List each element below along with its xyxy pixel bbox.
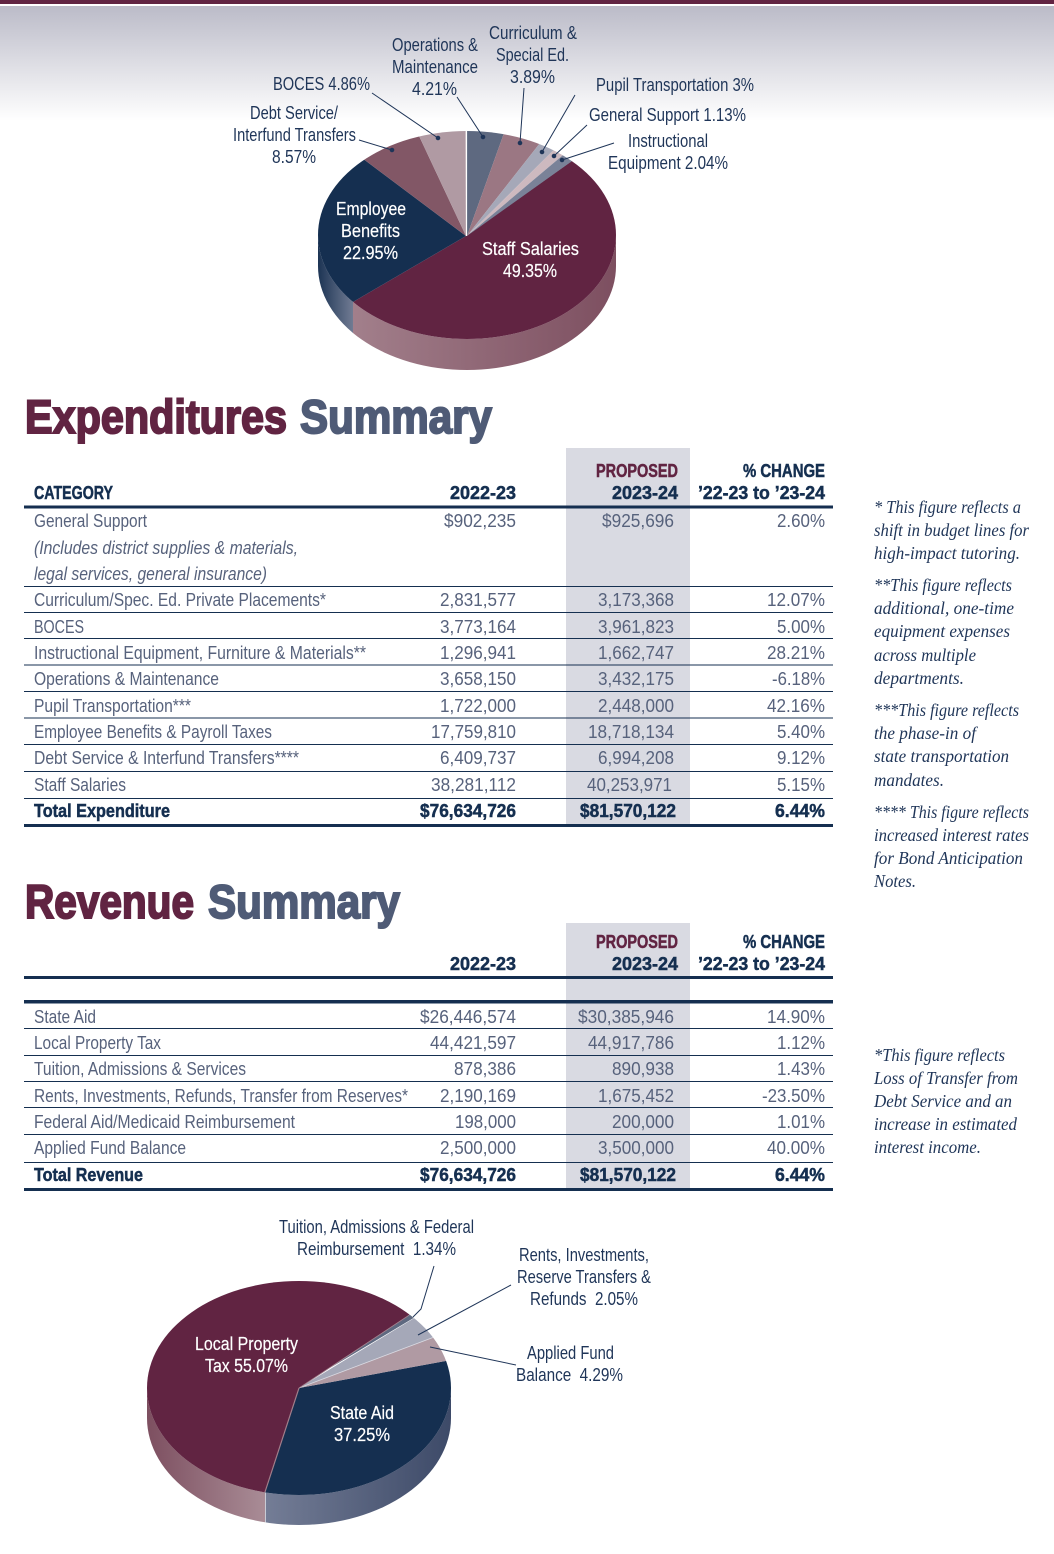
total row <box>34 1164 825 1185</box>
footnotes: expenditures: ***This figure reflects <box>874 700 1019 720</box>
table rows: 18,718,134 <box>588 721 674 742</box>
heading: revenue summary: Revenue <box>25 875 194 928</box>
table rows: (Includes district supplies & materials, <box>34 537 298 558</box>
total row: 6.44% <box>775 1164 825 1185</box>
table rows: 6,409,737 <box>440 747 516 768</box>
total row: 6.44% <box>775 800 825 821</box>
table rows: 40.00% <box>767 1137 825 1158</box>
table rows: 5.00% <box>777 616 825 637</box>
table rows: 3,658,150 <box>440 668 516 689</box>
pie labels: expenditures: 22.95% <box>343 242 398 263</box>
footnotes: expenditures: mandates. <box>874 770 944 790</box>
table header: 2022-23 <box>450 953 516 974</box>
table rows <box>34 510 825 795</box>
footnotes: expenditures <box>873 497 1029 891</box>
table header: ’22-23 to ’23-24 <box>698 953 826 974</box>
table header: CATEGORY <box>34 482 114 503</box>
table header: % CHANGE <box>743 931 825 952</box>
table rows: Local Property Tax <box>34 1032 162 1053</box>
leader lines: expenditures pie <box>359 88 614 162</box>
footnotes: expenditures: the phase-in of <box>874 723 978 743</box>
table rows: Pupil Transportation*** <box>34 695 191 716</box>
footnotes: expenditures: for Bond Anticipation <box>874 848 1023 868</box>
heading: revenue summary: Summary <box>208 875 400 928</box>
footnote: revenue: interest income. <box>874 1137 981 1157</box>
footnotes: expenditures: **This figure reflects <box>874 575 1012 595</box>
table rows: 2,500,000 <box>440 1137 516 1158</box>
pie labels: expenditures: Maintenance <box>392 56 478 77</box>
top banner <box>0 0 1054 131</box>
table rows: $26,446,574 <box>420 1006 516 1027</box>
table rows: 200,000 <box>612 1111 674 1132</box>
table header: 2023-24 <box>612 482 679 503</box>
table rows: 42.16% <box>767 695 825 716</box>
pie labels: expenditures: Operations & <box>392 34 479 55</box>
pie labels: revenue: 37.25% <box>334 1424 390 1445</box>
table rows: -6.18% <box>772 668 825 689</box>
pie labels: expenditures: General Support 1.13% <box>589 104 746 125</box>
footnotes: expenditures: equipment expenses <box>874 621 1010 641</box>
footnote: revenue: Debt Service and an <box>873 1091 1012 1111</box>
table rows: Curriculum/Spec. Ed. Private Placements* <box>34 589 326 610</box>
pie labels: expenditures: Curriculum & <box>489 22 578 43</box>
pie labels: revenue: Tax 55.07% <box>205 1355 288 1376</box>
footnotes: expenditures: state transportation <box>874 746 1009 766</box>
total row: $76,634,726 <box>420 1164 516 1185</box>
table rows: 28.21% <box>767 642 825 663</box>
pie labels: revenue: Applied Fund <box>527 1342 614 1363</box>
table rows: 3,173,368 <box>598 589 674 610</box>
pie labels: expenditures: Special Ed. <box>496 44 569 65</box>
table rows: $902,235 <box>444 510 516 531</box>
table rows: Applied Fund Balance <box>34 1137 186 1158</box>
table rows: $925,696 <box>602 510 674 531</box>
table rows: 9.12% <box>777 747 825 768</box>
pie labels: expenditures: 49.35% <box>503 260 557 281</box>
pie labels: expenditures: 3.89% <box>510 66 555 87</box>
pie labels: expenditures: Equipment 2.04% <box>608 152 728 173</box>
expenditures pie chart <box>318 131 616 370</box>
footnotes: expenditures: Notes. <box>873 871 916 891</box>
table rows: $30,385,946 <box>578 1006 674 1027</box>
table rows: 890,938 <box>612 1058 674 1079</box>
table rows: Rents, Investments, Refunds, Transfer from Reserves* <box>34 1085 408 1106</box>
table rows <box>34 1006 825 1158</box>
pie labels: revenue: Tuition, Admissions & Federal <box>279 1216 474 1237</box>
pie labels: revenue: Reserve Transfers & <box>517 1266 652 1287</box>
table rows: 878,386 <box>454 1058 516 1079</box>
table rows: 3,432,175 <box>598 668 674 689</box>
table rows: -23.50% <box>762 1085 825 1106</box>
table rows: 1,662,747 <box>598 642 674 663</box>
table header: 2023-24 <box>612 953 679 974</box>
footnotes: expenditures: increased interest rates <box>874 825 1029 845</box>
table header: ’22-23 to ’23-24 <box>698 482 826 503</box>
total row: $76,634,726 <box>420 800 516 821</box>
revenue pie chart <box>147 1281 451 1525</box>
table rows: 44,421,597 <box>430 1032 516 1053</box>
table: expenditures <box>24 448 833 827</box>
total row <box>34 800 825 821</box>
table rows: Operations & Maintenance <box>34 668 219 689</box>
pie labels: expenditures: Benefits <box>341 220 400 241</box>
heading: expenditures summary: Summary <box>300 390 492 443</box>
table rows: 2,831,577 <box>440 589 516 610</box>
table header <box>34 460 826 503</box>
pie labels: expenditures: Instructional <box>628 130 708 151</box>
table rows: Staff Salaries <box>34 774 126 795</box>
footnotes: expenditures: **** This figure reflects <box>874 802 1029 822</box>
pie labels: expenditures: 4.21% <box>412 78 457 99</box>
heading: expenditures summary <box>25 390 492 443</box>
footnotes: expenditures: * This figure reflects a <box>874 497 1021 517</box>
table rows: Employee Benefits & Payroll Taxes <box>34 721 272 742</box>
heading: expenditures summary: Expenditures <box>25 390 287 443</box>
footnote: revenue: *This figure reflects <box>874 1045 1005 1065</box>
table rows: 14.90% <box>767 1006 825 1027</box>
heading: revenue summary <box>25 875 400 928</box>
pie labels: expenditures: Staff Salaries <box>482 238 579 259</box>
table rows: 3,773,164 <box>440 616 516 637</box>
table rows: 5.15% <box>777 774 825 795</box>
table rows: 2.60% <box>777 510 825 531</box>
table rows: 17,759,810 <box>431 721 516 742</box>
table rows: 6,994,208 <box>598 747 674 768</box>
pie labels: expenditures: 8.57% <box>272 146 316 167</box>
table rows: Instructional Equipment, Furniture & Materials** <box>34 642 366 663</box>
pie labels: revenue: Balance 4.29% <box>516 1364 623 1385</box>
table rows: 1,722,000 <box>440 695 516 716</box>
table rows: Tuition, Admissions & Services <box>34 1058 246 1079</box>
table rows: 1.12% <box>777 1032 825 1053</box>
pie labels: expenditures: Interfund Transfers <box>233 124 356 145</box>
table rows: BOCES <box>34 616 84 637</box>
pie labels: revenue: Local Property <box>195 1333 299 1354</box>
table header: % CHANGE <box>743 460 825 481</box>
table: revenue <box>24 923 833 1191</box>
table rows: 44,917,786 <box>588 1032 674 1053</box>
table rows: 1.43% <box>777 1058 825 1079</box>
table rows: 1,675,452 <box>598 1085 674 1106</box>
table header <box>450 931 826 974</box>
total row: $81,570,122 <box>580 800 676 821</box>
pie labels: revenue: Refunds 2.05% <box>530 1288 638 1309</box>
table rows: 1.01% <box>777 1111 825 1132</box>
pie labels: expenditures: BOCES 4.86% <box>273 73 370 94</box>
table rows: 3,961,823 <box>598 616 674 637</box>
table rows: 12.07% <box>767 589 825 610</box>
table header: 2022-23 <box>450 482 516 503</box>
table rows: 5.40% <box>777 721 825 742</box>
pie labels: revenue: State Aid <box>330 1402 394 1423</box>
footnote: revenue: Loss of Transfer from <box>873 1068 1018 1088</box>
footnote: revenue <box>873 1045 1018 1157</box>
leader lines: revenue pie <box>413 1266 516 1365</box>
footnotes: expenditures: departments. <box>874 668 964 688</box>
table rows: General Support <box>34 510 147 531</box>
footnotes: expenditures: high-impact tutoring. <box>874 543 1020 563</box>
table rows: 40,253,971 <box>587 774 672 795</box>
table rows: legal services, general insurance) <box>34 563 267 584</box>
footnote: revenue: increase in estimated <box>874 1114 1017 1134</box>
table rows: 2,448,000 <box>598 695 674 716</box>
table rows: 2,190,169 <box>440 1085 516 1106</box>
footnotes: expenditures: shift in budget lines for <box>874 520 1029 540</box>
table header: PROPOSED <box>596 460 678 481</box>
table rows: 198,000 <box>455 1111 516 1132</box>
pie labels: expenditures: Employee <box>336 198 406 219</box>
table rows: 38,281,112 <box>431 774 516 795</box>
pie labels: revenue <box>195 1216 652 1445</box>
pie labels: expenditures <box>233 22 754 281</box>
table rows: 3,500,000 <box>598 1137 674 1158</box>
table rows: 1,296,941 <box>440 642 516 663</box>
table header: PROPOSED <box>596 931 678 952</box>
pie labels: expenditures: Debt Service/ <box>250 102 339 123</box>
total row: Total Revenue <box>34 1164 143 1185</box>
table rows: State Aid <box>34 1006 96 1027</box>
pie labels: expenditures: Pupil Transportation 3% <box>596 74 754 95</box>
table rows: Federal Aid/Medicaid Reimbursement <box>34 1111 295 1132</box>
pie labels: revenue: Rents, Investments, <box>519 1244 649 1265</box>
footnotes: expenditures: across multiple <box>874 645 976 665</box>
table rows: Debt Service & Interfund Transfers**** <box>34 747 299 768</box>
pie labels: revenue: Reimbursement 1.34% <box>297 1238 456 1259</box>
total row: $81,570,122 <box>580 1164 676 1185</box>
total row: Total Expenditure <box>34 800 170 821</box>
footnotes: expenditures: additional, one-time <box>874 598 1014 618</box>
